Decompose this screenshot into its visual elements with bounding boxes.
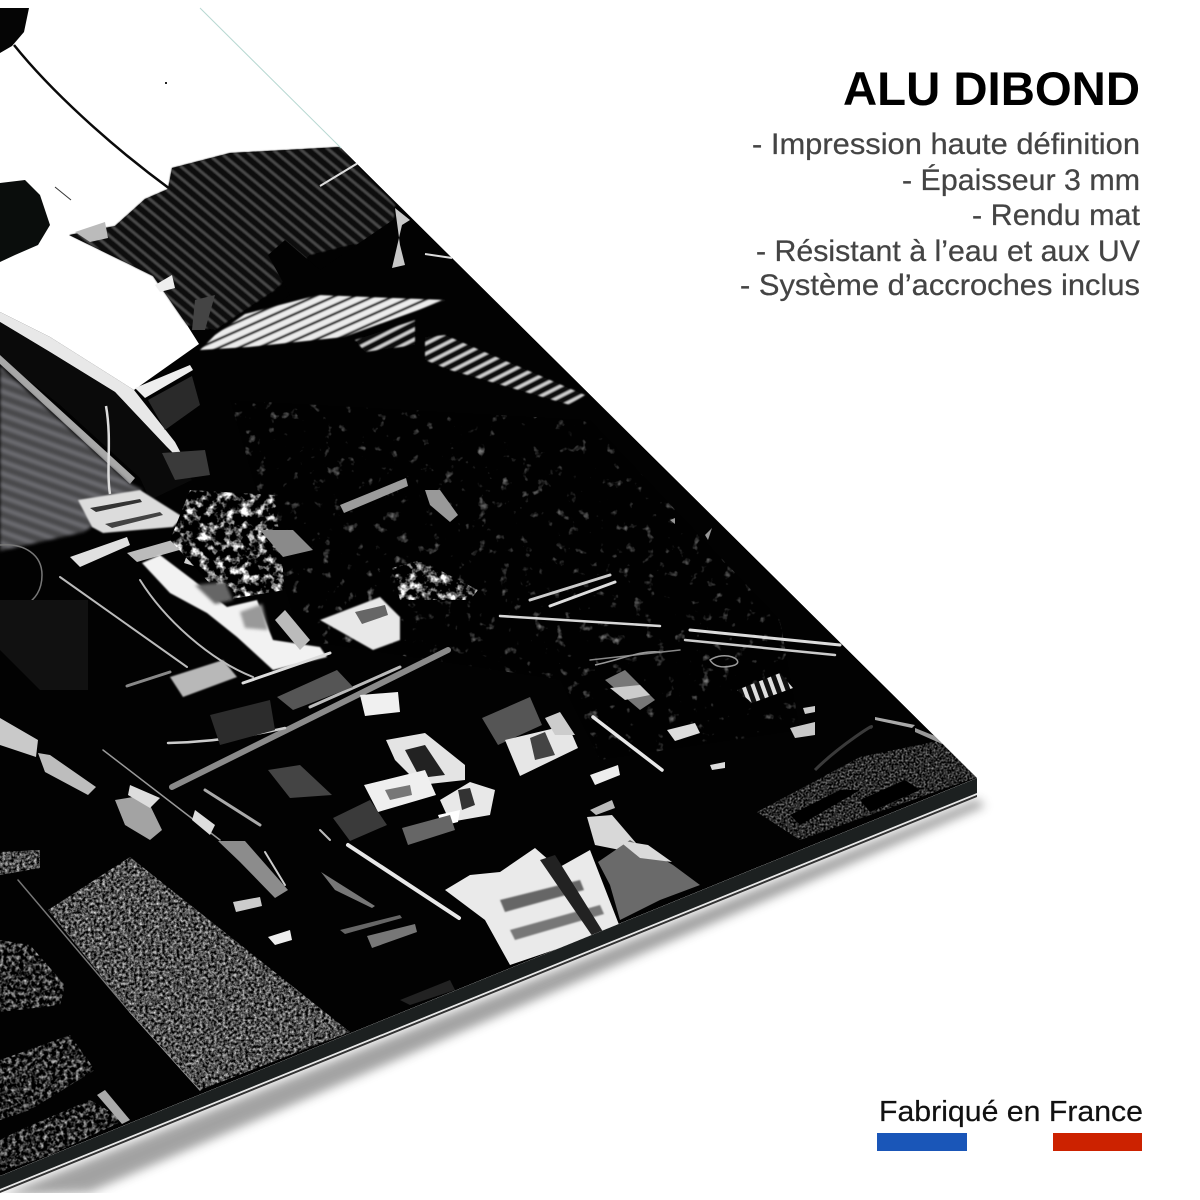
made in France label: Fabriqué en France	[879, 1096, 1143, 1128]
title: ALU DIBOND	[843, 62, 1140, 115]
photo: white stall bottom right	[445, 762, 725, 965]
feature list: - Résistant à l’eau et aux UV	[756, 236, 1141, 268]
panel: faint top edge line	[200, 8, 341, 148]
photo: sparse speckles in the dark area	[230, 400, 800, 760]
photo: central white sheets	[142, 555, 478, 670]
photo: right side small highlights	[595, 518, 815, 741]
photo: striped roof on the right	[355, 320, 585, 405]
photo: corrugated dark roof	[70, 147, 395, 330]
photo: grey wall with grain	[0, 850, 350, 1172]
photo: market stalls highlights	[0, 478, 458, 690]
photo: white corrugated roof	[200, 295, 446, 350]
photo: lamp and wire in the sky	[0, 8, 170, 200]
photo: dark sign at the corner	[757, 717, 977, 840]
French flag bars	[877, 1133, 1142, 1151]
photo: window top right of centre	[482, 697, 578, 776]
photo: string hanging over tarp	[106, 406, 110, 494]
photo: grey tarp	[0, 366, 142, 551]
panel: thick edge of the aluminium panel	[0, 778, 977, 1193]
feature list: - Impression haute définition	[752, 129, 1140, 161]
photo: left side details	[0, 660, 353, 945]
photo: central window with bananas	[321, 692, 495, 948]
photo: dark mass of the street scene	[0, 147, 977, 1176]
panel shadow	[0, 799, 985, 1196]
photo: dark lower strip details	[400, 980, 455, 1005]
photo: black shadow under dark roof	[268, 220, 394, 282]
photo: white cracks on roof edge	[75, 163, 452, 330]
feature list: - Rendu mat	[972, 200, 1140, 232]
feature list: - Épaisseur 3 mm	[902, 164, 1140, 197]
feature list: - Système d’accroches inclus	[740, 270, 1140, 302]
photo: white beam and awning edge	[0, 312, 210, 500]
photo: thin wires and shelves	[18, 575, 840, 1090]
feature list	[740, 129, 1141, 302]
white margin below the image	[0, 1193, 1200, 1200]
photo: dark round shape at left	[0, 180, 50, 262]
